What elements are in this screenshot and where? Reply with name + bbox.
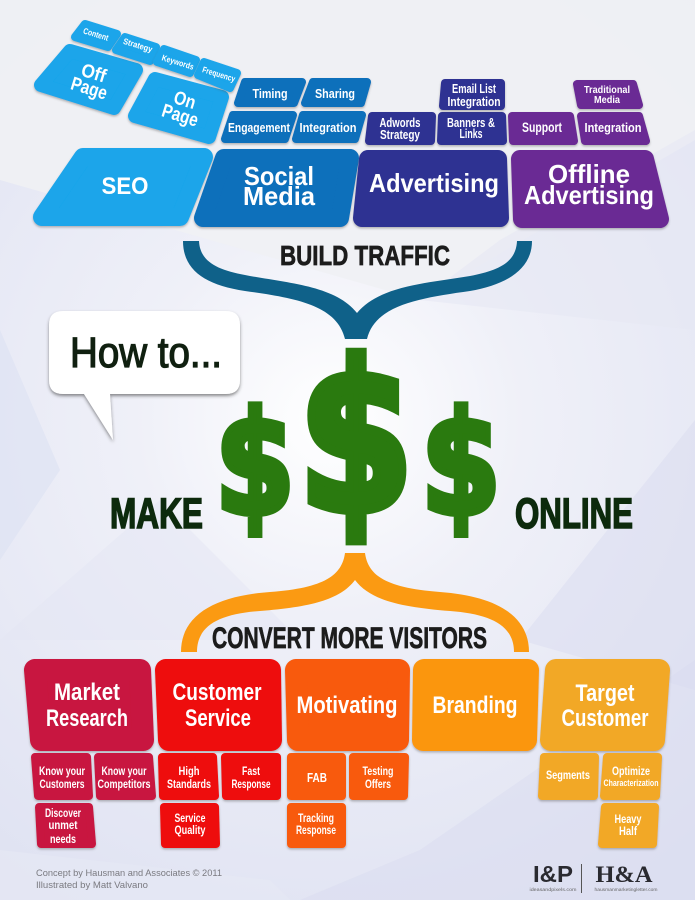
block: Fast Response: Response (232, 777, 271, 791)
block: Integration: Integration (584, 120, 642, 135)
dollar sign: right: $ (421, 381, 501, 548)
block: Traditional Media: Traditional (584, 84, 630, 96)
block: Discover unmet needs: unmet (48, 818, 78, 832)
group: Motivating (291, 670, 405, 844)
block: Frequency (198, 62, 237, 88)
block: Content (75, 24, 117, 47)
group: Branding (423, 670, 528, 740)
credits: Concept by Hausman and Associates © 2011 (36, 868, 222, 879)
block: On Page: Page (159, 101, 201, 131)
block: Fast Response: Fast (242, 764, 260, 778)
block: Optimize Characterization (604, 757, 658, 796)
block: Traditional Media: Media (594, 94, 620, 106)
block: Market Research: Research (46, 705, 128, 732)
block: Offline Advertising (520, 159, 660, 219)
block: Keywords: Keywords (161, 53, 195, 72)
block: Email List Integration (443, 81, 501, 109)
block: Branding: Branding (432, 692, 518, 719)
block: Motivating (296, 670, 399, 740)
group: Social Media (203, 82, 367, 218)
block: Target Customer: Target (576, 680, 634, 707)
block: Motivating: Motivating (296, 692, 398, 719)
block: Tracking Response (291, 807, 342, 844)
block: Customer Service: Service (185, 705, 251, 732)
block: Optimize Characterization: Optimize (612, 764, 650, 778)
block: Target Customer: Customer (562, 705, 648, 732)
logo: I&P (530, 861, 577, 892)
block: Discover unmet needs (39, 806, 92, 846)
credits: Illustrated by Matt Valvano (36, 880, 148, 891)
bracket: convert visitors (181, 553, 529, 652)
block: Integration (581, 116, 646, 141)
block: Testing Offers: Offers (365, 777, 391, 791)
heading: build traffic: BUILD TRAFFIC (280, 240, 450, 271)
block: Engagement: Engagement (228, 120, 291, 135)
logos (530, 861, 658, 893)
panel: build traffic channels (41, 24, 660, 219)
group: Market Research (35, 670, 152, 846)
block: Adwords Strategy: Strategy (380, 127, 421, 142)
block: FAB (291, 757, 342, 796)
block: Off Page: Off (79, 60, 109, 88)
block: Off Page (41, 51, 136, 108)
block: Engagement (225, 115, 293, 139)
block: Integration (296, 115, 362, 139)
block: Service Quality (164, 807, 216, 844)
block: Integration: Integration (300, 120, 357, 135)
bracket: build traffic (183, 241, 532, 339)
block: Sharing: Sharing (315, 86, 355, 101)
block: Heavy Half: Heavy (614, 812, 642, 826)
block: SEO (42, 157, 204, 217)
block: Customer Service: Customer (172, 679, 262, 706)
title: make money online (110, 319, 633, 560)
logo: H&A: H&A (596, 862, 653, 887)
block: Banners and Links: Banners & (447, 115, 495, 130)
block: Advertising: Advertising (369, 168, 499, 198)
block: Traditional Media (577, 84, 639, 106)
block: Email List Integration: Integration (448, 94, 501, 109)
credits (36, 868, 222, 891)
block: Market Research (35, 670, 143, 740)
block: Off Page: Page (68, 74, 110, 104)
block: Discover unmet needs: Discover (45, 806, 81, 820)
block: Service Quality: Quality (174, 823, 206, 837)
block: Segments: Segments (546, 768, 590, 782)
block: Know your Customers: Customers (40, 777, 85, 791)
group: Advertising (362, 81, 503, 218)
block: Timing: Timing (252, 86, 288, 101)
block: Service Quality: Service (174, 811, 206, 825)
block: Support: Support (522, 119, 562, 135)
block: Adwords Strategy: Adwords (380, 115, 420, 130)
dollar sign: left: $ (215, 381, 295, 548)
speech bubble: How to: How to... (70, 329, 222, 377)
block: Customer Service (166, 670, 271, 740)
block: Adwords Strategy (369, 115, 432, 142)
block: Tracking Response: Response (296, 823, 336, 837)
block: Keywords (157, 49, 196, 73)
block: Know your Customers: Know your (39, 764, 85, 778)
block: Strategy: Strategy (122, 36, 154, 54)
block: Banners and Links: Links (460, 126, 482, 141)
speech bubble: How to (49, 311, 240, 440)
block: Optimize Characterization: Characterization (604, 778, 658, 788)
block: High Standards (162, 757, 215, 796)
block: Frequency: Frequency (201, 64, 237, 84)
heading: convert more visitors: CONVERT MORE VISITORS (212, 622, 487, 655)
block: Testing Offers (353, 757, 405, 796)
block: SEO: SEO (102, 173, 148, 200)
group: Offline Advertising (512, 84, 660, 219)
block: Know your Competitors: Know your (102, 764, 147, 778)
block: On Page: On (171, 87, 198, 114)
block: Fast Response (225, 757, 277, 796)
panel: conversion categories (35, 670, 659, 846)
block: Social Media: Media (243, 181, 316, 211)
block: Sharing (305, 82, 367, 103)
block: Support (512, 116, 574, 141)
block: Know your Customers (35, 757, 89, 796)
block: Offline Advertising: Advertising (524, 180, 654, 210)
logo: I&P: ideasandpixels.com (530, 887, 577, 892)
block: Email List Integration: Email List (452, 81, 496, 96)
block: Heavy Half: Half (619, 824, 638, 838)
block: Heavy Half (602, 807, 655, 844)
block: Timing (238, 82, 302, 103)
block: Social Media (203, 158, 350, 218)
dollar sign: center: $ (298, 319, 414, 560)
block: Offline Advertising: Offline (548, 159, 630, 189)
block: Content: Content (82, 26, 110, 43)
block: Discover unmet needs: needs (50, 832, 76, 846)
block: Know your Competitors: Competitors (98, 777, 151, 791)
block: Target Customer (551, 670, 659, 740)
group: SEO (41, 24, 237, 217)
block: Market Research: Market (54, 679, 120, 706)
block: Advertising (362, 159, 500, 218)
block: Strategy (116, 36, 156, 61)
block: Tracking Response: Tracking (298, 811, 334, 825)
block: Segments (542, 757, 595, 796)
block: FAB: FAB (307, 770, 327, 785)
block: High Standards: High (178, 764, 200, 778)
block: Testing Offers: Testing (362, 764, 394, 778)
word: MAKE: MAKE (110, 490, 203, 538)
block: On Page (135, 79, 222, 137)
group: Customer Service (162, 670, 277, 844)
word: ONLINE: ONLINE (515, 490, 633, 538)
logo: I&P: I&P (533, 861, 573, 887)
block: Banners and Links (441, 115, 503, 141)
block: High Standards: Standards (167, 777, 211, 791)
block: Social Media: Social (244, 161, 314, 191)
group: Target Customer (542, 670, 659, 844)
block: Know your Competitors (98, 757, 152, 796)
logo: H&A: hausmanmarketingletter.com (594, 887, 658, 892)
